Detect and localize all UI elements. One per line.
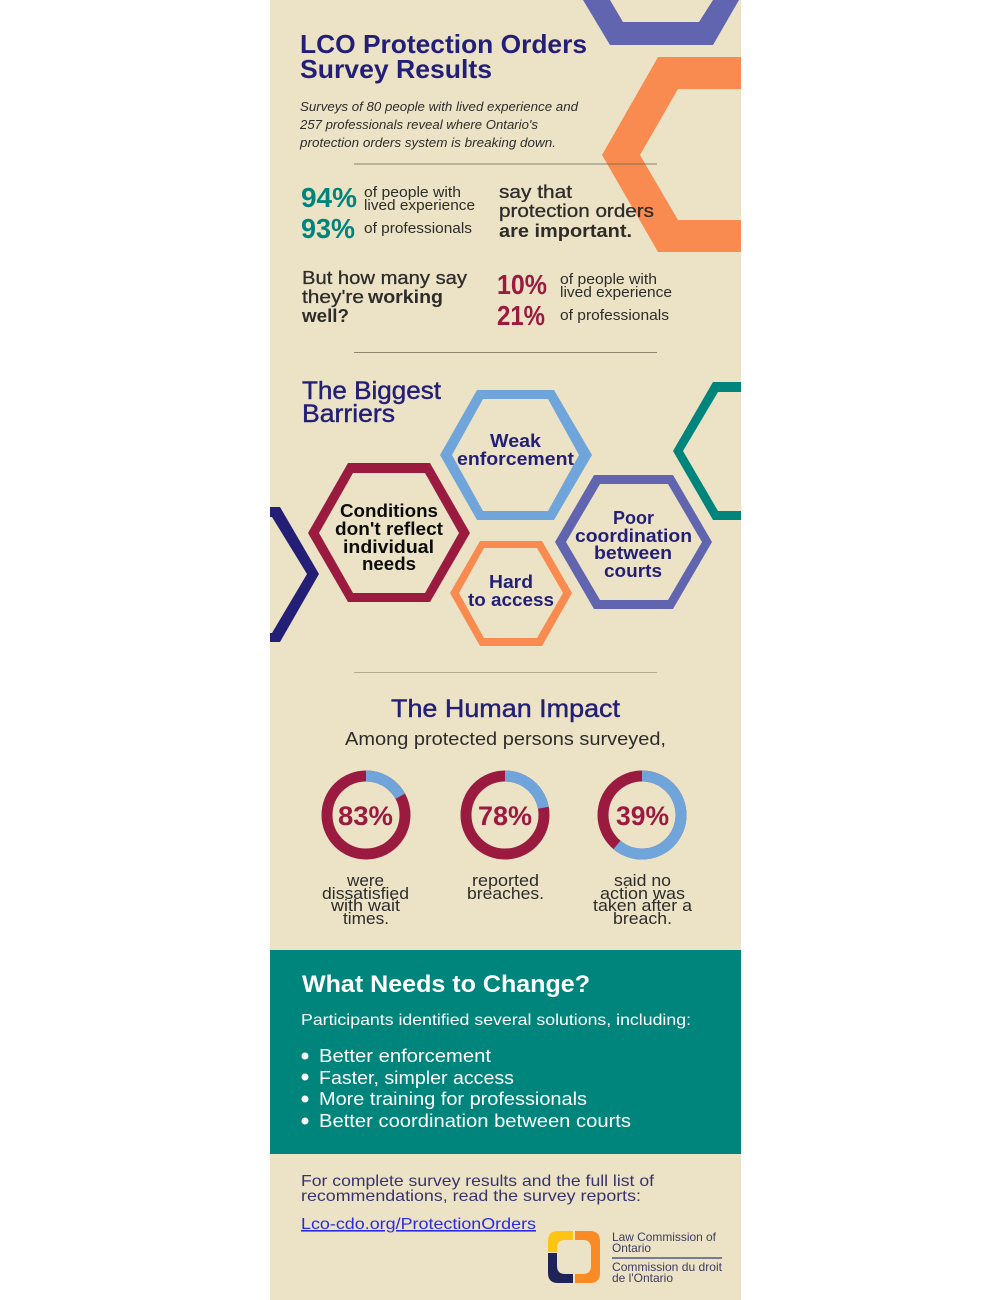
cream page background <box>270 0 741 1300</box>
statement: say that protection orders are important: are important. <box>499 220 632 241</box>
heading: the biggest barriers: The Biggest <box>302 377 441 405</box>
footer text <box>301 1173 655 1205</box>
caption: were dissatisfied with wait times: were <box>346 872 384 890</box>
intro text <box>299 100 579 150</box>
solutions list: Better coordination between courts <box>319 1111 631 1131</box>
panel heading: What Needs to Change? <box>302 971 590 998</box>
stat label: people with lived experience: lived experience <box>364 198 475 214</box>
donut: 39% said no action was taken: 39% <box>616 801 669 831</box>
question: but how many say they're working well: well? <box>301 305 349 326</box>
decorative hexagon: teal right <box>673 382 741 520</box>
barrier: hard to access: Hard <box>489 572 533 592</box>
barrier: hard to access: to access <box>468 590 554 610</box>
solutions list <box>302 1046 631 1131</box>
caption: reported breaches: breaches. <box>467 885 544 903</box>
barrier: conditions don't reflect individual needs: Conditions <box>340 501 438 521</box>
logo text: Commission du droit <box>612 1260 723 1274</box>
stats: protection orders are important <box>301 181 654 244</box>
question: but how many say they're working well: working <box>367 286 443 307</box>
solutions list: More training for professionals <box>319 1089 587 1109</box>
stat label: people with lived experience <box>364 185 475 214</box>
stats: how many say they're working well <box>301 267 672 331</box>
heading: the biggest barriers: Barriers <box>302 400 395 428</box>
barrier: poor coordination between courts: Poor <box>613 508 654 528</box>
statement: say that protection orders are important <box>499 181 654 241</box>
stat label: people with lived experience: of people with <box>560 272 657 288</box>
logo text: de l'Ontario <box>612 1271 673 1285</box>
stat label: people with lived experience: lived experience <box>560 285 672 301</box>
barrier: weak enforcement <box>440 390 592 520</box>
caption: were dissatisfied with wait times: dissatisfied <box>322 885 409 903</box>
statement: say that protection orders are important: protection orders <box>499 200 654 221</box>
intro text: protection orders system is breaking down. <box>299 136 556 150</box>
donut: 83% dissatisfied with wait times <box>322 776 409 928</box>
caption: reported breaches: reported <box>472 872 539 890</box>
stat: 93%: 93% <box>301 213 355 244</box>
barrier: poor coordination between courts <box>555 475 712 609</box>
stat label: professionals: of professionals <box>560 308 669 324</box>
stat label: people with lived experience <box>560 272 672 301</box>
question: but how many say they're working well: they're <box>302 286 364 307</box>
panel intro: Participants identified several solutions, including: <box>301 1012 691 1029</box>
title <box>300 29 587 84</box>
barrier: conditions don't reflect individual needs: needs <box>362 554 416 574</box>
solutions list: Better enforcement <box>319 1046 491 1066</box>
title: Survey Results <box>300 54 492 84</box>
caption: were dissatisfied with wait times: with wait <box>330 897 400 915</box>
heading: the biggest barriers <box>302 377 441 428</box>
barrier: poor coordination between courts: courts <box>604 561 662 581</box>
donut: 78% reported breaches <box>466 776 544 903</box>
question: but how many say they're working well: But how many say <box>302 267 468 288</box>
caption: reported breaches <box>467 872 544 903</box>
caption: said no action was taken after a breach: said no <box>614 872 671 890</box>
decorative hexagon: orange right <box>602 57 741 252</box>
panel: what needs to change <box>270 950 741 1154</box>
logo text: Ontario <box>612 1241 651 1255</box>
stat: 10%: 10% <box>497 269 547 300</box>
donut: 39% said no action was taken <box>593 776 693 928</box>
caption: said no action was taken after a breach <box>593 872 693 928</box>
decorative hexagon: navy left <box>270 507 319 642</box>
logo text <box>612 1230 723 1285</box>
heading: the human impact: The Human Impact <box>391 695 620 723</box>
donut: 78% reported breaches: 78% <box>478 801 532 831</box>
question: but how many say they're working well <box>301 267 468 326</box>
icon: logo mark <box>548 1231 600 1283</box>
report link: Lco-cdo.org/ProtectionOrders <box>301 1216 536 1233</box>
caption: were dissatisfied with wait times <box>322 872 409 928</box>
footer text: For complete survey results and the full list of <box>301 1173 655 1190</box>
donut: 83% dissatisfied with wait times: 83% <box>338 801 393 831</box>
stat: 94%: 94% <box>301 182 357 213</box>
logo text: Law Commission of <box>612 1230 717 1244</box>
stat: 21%: 21% <box>497 300 545 331</box>
stat label: people with lived experience: of people with <box>364 185 461 201</box>
barrier: hard to access <box>450 541 572 646</box>
caption: said no action was taken after a breach: breach. <box>613 910 672 928</box>
footer text: recommendations, read the survey reports: <box>301 1188 641 1205</box>
caption: said no action was taken after a breach: action was <box>600 885 685 903</box>
decorative hexagon: purple top <box>583 0 739 45</box>
caption: were dissatisfied with wait times: times. <box>343 910 389 928</box>
barrier: conditions don't reflect individual needs: individual <box>343 537 434 557</box>
barrier: conditions don't reflect individual needs: don't reflect <box>335 519 443 539</box>
intro text: Surveys of 80 people with lived experience and <box>300 100 579 114</box>
statement: say that protection orders are important: say that <box>499 181 572 202</box>
subheading: among protected persons surveyed: Among protected persons surveyed, <box>345 729 666 749</box>
barrier: weak enforcement: enforcement <box>457 449 574 469</box>
stat label: professionals: of professionals <box>364 221 472 237</box>
logo: law commission of ontario <box>548 1230 723 1285</box>
barrier: weak enforcement: Weak <box>490 431 542 451</box>
intro text: 257 professionals reveal where Ontario's <box>299 118 538 132</box>
solutions list: Faster, simpler access <box>319 1068 514 1088</box>
barrier: poor coordination between courts: coordination <box>575 526 692 546</box>
barrier: poor coordination between courts: between <box>594 543 672 563</box>
barrier: conditions don't reflect individual needs <box>308 463 470 602</box>
title: LCO Protection Orders <box>300 29 587 59</box>
caption: said no action was taken after a breach: taken after a <box>593 897 693 915</box>
